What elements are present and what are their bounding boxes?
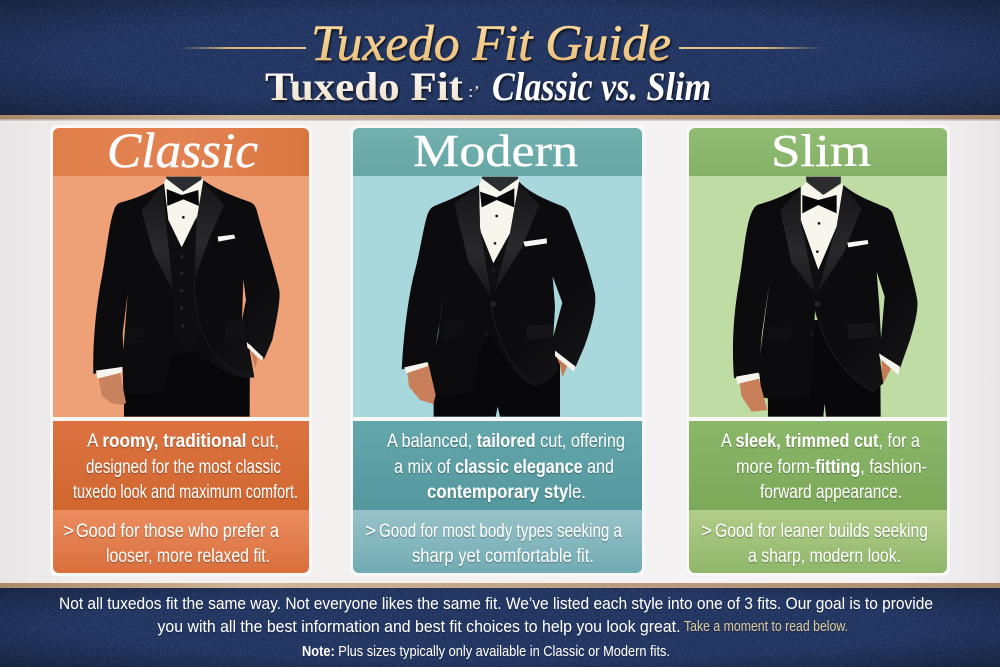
- slim description text: more form-fitting, fashion-: [736, 457, 927, 478]
- slim description text: A sleek, trimmed cut, for a: [721, 431, 920, 452]
- slim tuxedo figure: [733, 177, 918, 417]
- footer text: you with all the best information and best fit choices to help you look great.: [158, 617, 680, 636]
- slim good-for text: [701, 521, 928, 567]
- panel: Slim: [686, 125, 950, 576]
- classic header bar: [53, 128, 309, 176]
- modern good-for block: [353, 510, 642, 573]
- classic good-for text: [63, 521, 279, 567]
- slim image background: [689, 176, 947, 417]
- modern image background: [353, 176, 642, 417]
- classic good-for text: Good for those who prefer a: [76, 521, 279, 542]
- slim heading: Slim: [771, 125, 871, 176]
- header banner: [0, 0, 1000, 120]
- classic description text: A roomy, traditional cut,: [87, 431, 279, 452]
- footer banner: [0, 583, 1000, 667]
- classic good-for block: [53, 510, 309, 573]
- modern description block: [353, 421, 642, 510]
- slim description text: [721, 431, 927, 503]
- classic description block: [53, 421, 309, 510]
- classic good-for text: >: [63, 521, 74, 542]
- classic description text: designed for the most classic: [86, 457, 281, 478]
- slim description text: forward appearance.: [760, 482, 902, 503]
- modern heading: Modern: [413, 125, 578, 176]
- classic heading: Classic: [107, 122, 258, 178]
- footer text: Not all tuxedos fit the same way. Not everyone likes the same fit. We’ve listed each style into one of 3 fits. Our goal is to provide: [59, 594, 933, 613]
- subtitle: Tuxedo Fit: Classic vs. Slim: Tuxedo Fit: [265, 64, 464, 109]
- slim header bar: [689, 128, 947, 176]
- classic image background: [53, 176, 309, 417]
- modern good-for text: sharp yet comfortable fit.: [412, 546, 594, 567]
- footer text: Take a moment to read below.: [684, 618, 848, 635]
- modern tuxedo figure: [402, 177, 595, 417]
- title: Tuxedo Fit Guide: Tuxedo Fit Guide: [311, 16, 671, 72]
- modern good-for text: [365, 521, 622, 567]
- classic good-for text: looser, more relaxed fit.: [106, 546, 270, 567]
- slim good-for text: a sharp, modern look.: [748, 546, 901, 567]
- modern description text: A balanced, tailored cut, offering: [387, 431, 625, 452]
- slim description block: [689, 421, 947, 510]
- subtitle: Tuxedo Fit: Classic vs. Slim: [265, 64, 711, 109]
- modern description text: [387, 431, 625, 503]
- subtitle: Tuxedo Fit: Classic vs. Slim: :’: [468, 82, 480, 101]
- slim good-for block: [689, 510, 947, 573]
- subtitle: Tuxedo Fit: Classic vs. Slim: Classic vs. Slim: [492, 64, 711, 109]
- classic description text: [73, 431, 298, 503]
- panel: Modern: [350, 125, 645, 576]
- page background: paper: [0, 116, 1000, 588]
- modern good-for text: Good for most body types seeking a: [379, 521, 622, 542]
- slim good-for text: >: [701, 521, 712, 542]
- modern description text: contemporary style.: [427, 482, 586, 503]
- classic description text: tuxedo look and maximum comfort.: [73, 482, 298, 503]
- modern good-for text: >: [365, 521, 376, 542]
- panel: Classic: [50, 122, 312, 576]
- footer text: [59, 594, 933, 660]
- modern description text: a mix of classic elegance and: [394, 457, 614, 478]
- footer text: Note: Plus sizes typically only available in Classic or Modern fits.: [302, 644, 670, 660]
- slim good-for text: Good for leaner builds seeking: [715, 521, 928, 542]
- modern header bar: [353, 128, 642, 176]
- classic tuxedo figure: [93, 177, 280, 417]
